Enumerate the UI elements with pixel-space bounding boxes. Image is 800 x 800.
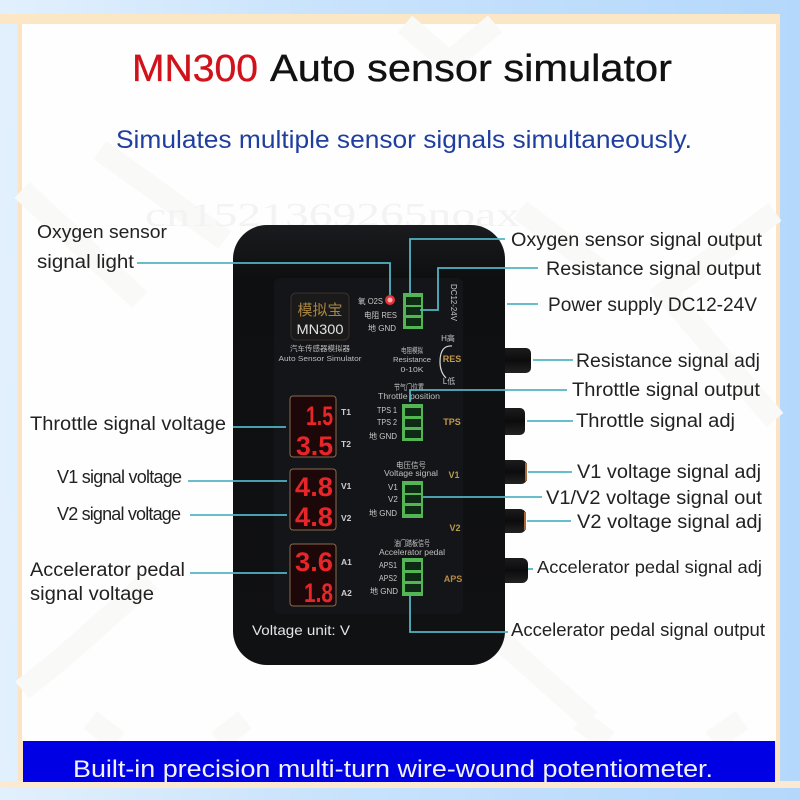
throttle block: 节气门位置 <box>394 382 424 392</box>
O2 RES GND labels: 电阻 RES <box>364 310 397 320</box>
callout lines <box>137 239 573 632</box>
T1 T2: T2 <box>341 439 351 449</box>
device body: 地 GND <box>369 431 397 441</box>
subtitle: Simulates multiple sensor signals simultaneously. <box>116 126 692 154</box>
right labels: V1 voltage signal adj <box>577 462 761 483</box>
display: throttle: 1.5 <box>306 401 333 431</box>
label APS: APS <box>444 574 462 584</box>
display: voltage: 4.8 <box>295 502 333 532</box>
voltage block: 电压信号 <box>396 460 426 470</box>
logo badge: 模拟宝 <box>297 302 343 319</box>
RES dial: L低 <box>443 376 455 386</box>
logo badge: MN300 <box>296 321 344 337</box>
device body: V1 <box>388 483 398 492</box>
resistance block: Resistance <box>393 355 431 364</box>
right labels: Resistance signal adj <box>576 351 760 372</box>
right labels: Accelerator pedal signal adj <box>537 557 762 577</box>
connector: TPS <box>402 404 423 441</box>
product name: 汽车传感器模拟器 <box>290 343 350 353</box>
left labels: signal voltage <box>30 584 154 605</box>
inner panel <box>274 278 463 614</box>
right labels: Accelerator pedal signal output <box>511 620 765 640</box>
O2 LED <box>385 295 395 305</box>
bottom banner: Built-in precision multi-turn wire-wound potentiometer. <box>73 756 713 783</box>
display: throttle <box>290 396 336 461</box>
accelerator block: 油门踏板信号 <box>394 538 430 548</box>
voltage unit: Voltage unit: V <box>252 622 351 638</box>
T1 T2 <box>341 407 351 449</box>
O2 RES GND labels: 氧 O2S <box>358 296 383 306</box>
title: MN300 <box>132 48 258 90</box>
display: accelerator <box>290 544 336 608</box>
right labels: Oxygen sensor signal output <box>511 230 763 251</box>
throttle block: Throttle position <box>378 392 440 401</box>
right labels: Resistance signal output <box>546 259 762 280</box>
device body: TPS 2 <box>377 418 397 427</box>
title <box>132 48 672 90</box>
RES dial: RES <box>443 354 461 364</box>
left labels: Oxygen sensor <box>37 221 167 242</box>
device body: 地 GND <box>370 586 398 596</box>
device body <box>233 225 505 665</box>
RES dial: H高 <box>441 333 455 343</box>
display: throttle: 3.5 <box>296 431 333 461</box>
label TPS: TPS <box>443 417 461 427</box>
device body: TPS 1 <box>377 406 397 415</box>
device body: 地 GND <box>369 508 397 518</box>
watermark text: cn1521369265noax <box>145 197 520 234</box>
right labels: V1/V2 voltage signal out <box>546 488 763 509</box>
title: Auto sensor simulator <box>270 48 672 90</box>
V1 V2 <box>341 481 352 523</box>
RES dial <box>440 333 461 386</box>
product name <box>278 343 362 363</box>
bottom banner <box>23 741 775 783</box>
device body: APS1 <box>379 561 397 570</box>
A1 A2: A2 <box>341 588 352 598</box>
device body: APS2 <box>379 574 397 583</box>
DC label: DC12-24V <box>449 284 458 322</box>
resistance block: 0-10K <box>400 365 424 374</box>
connector: accelerator <box>402 558 423 596</box>
accelerator block <box>379 538 445 557</box>
display: voltage: 4.8 <box>295 472 333 502</box>
left labels: V2 signal voltage <box>57 504 181 524</box>
throttle block <box>378 382 440 401</box>
label V1: V1 <box>448 470 460 480</box>
knobs <box>498 348 531 583</box>
connector: voltage <box>402 481 423 518</box>
display: accelerator: 3.6 <box>295 547 333 577</box>
product name: Auto Sensor Simulator <box>278 354 362 363</box>
left labels: Accelerator pedal <box>30 560 185 581</box>
resistance block <box>393 345 431 374</box>
right labels <box>511 230 765 640</box>
connector: O2 RES <box>403 293 423 329</box>
right labels: Power supply DC12-24V <box>548 295 757 316</box>
resistance block: 电阻模拟 <box>401 345 423 355</box>
T1 T2: T1 <box>341 407 351 417</box>
A1 A2: A1 <box>341 557 352 567</box>
voltage block <box>384 460 438 478</box>
left labels: signal light <box>37 252 135 273</box>
V1 V2: V2 <box>341 513 352 523</box>
accelerator block: Accelerator pedal <box>379 548 445 557</box>
display: accelerator: 1.8 <box>304 578 333 608</box>
voltage block: Voltage signal <box>384 469 438 478</box>
right labels: Throttle signal output <box>572 380 761 401</box>
O2 RES GND labels <box>358 296 397 333</box>
left labels <box>30 221 226 605</box>
V1 V2: V1 <box>341 481 352 491</box>
display: voltage <box>290 469 336 532</box>
device body: V2 <box>388 495 398 504</box>
logo badge <box>291 293 349 340</box>
O2 RES GND labels: 地 GND <box>368 323 396 333</box>
right labels: Throttle signal adj <box>576 411 735 432</box>
label V2: V2 <box>449 523 461 533</box>
A1 A2 <box>341 557 352 598</box>
left labels: Throttle signal voltage <box>30 414 226 435</box>
left labels: V1 signal voltage <box>57 467 182 487</box>
right labels: V2 voltage signal adj <box>577 512 762 533</box>
